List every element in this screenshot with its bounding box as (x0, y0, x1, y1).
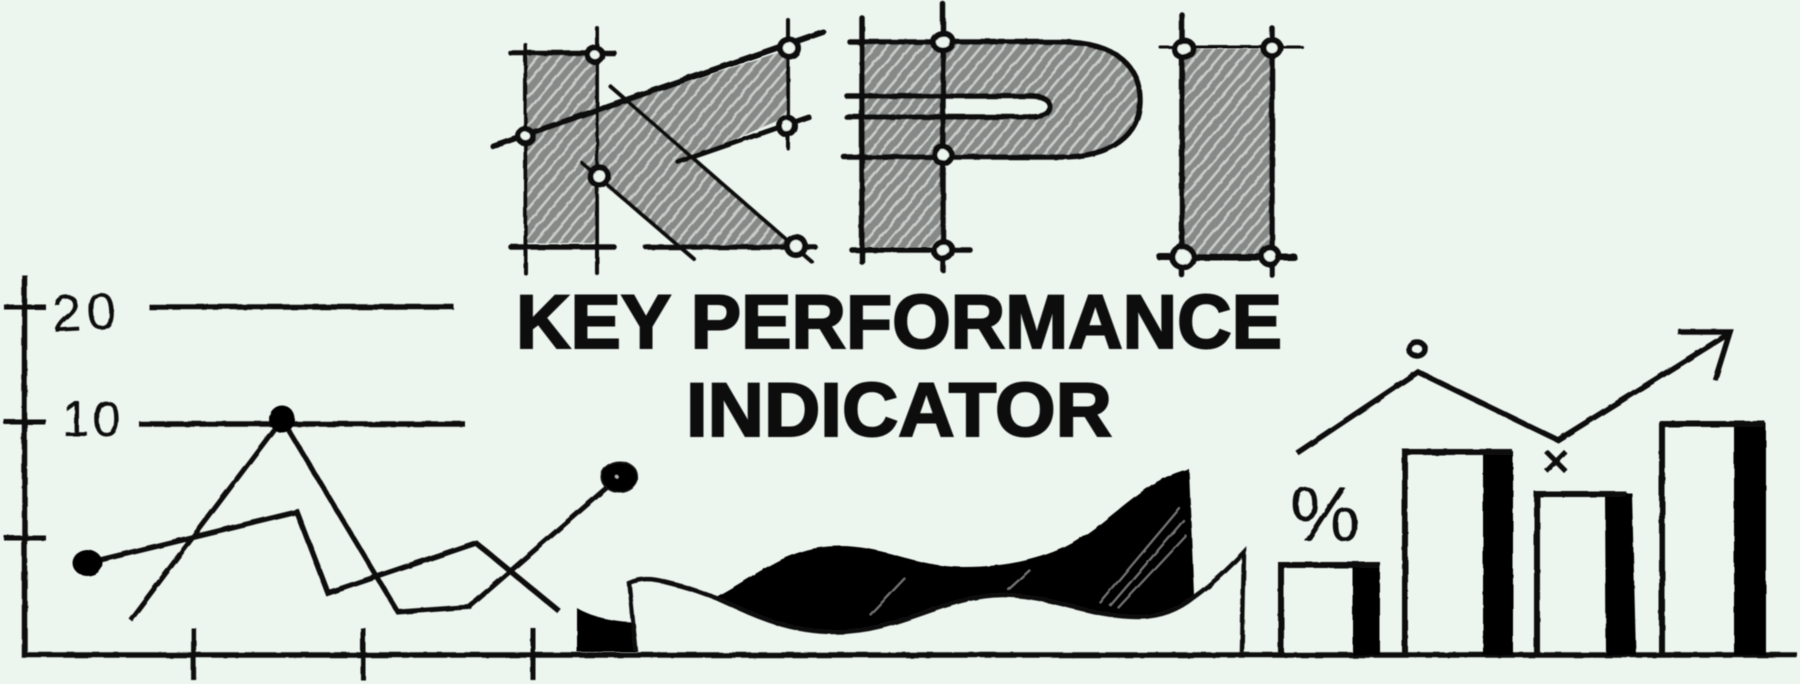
wave outline (629, 552, 1244, 653)
chart axes (4, 275, 1797, 680)
title: Key Performance Indicator (516, 280, 1282, 453)
trend arrow (1297, 332, 1730, 453)
icon: percent sign: % (1290, 470, 1360, 558)
axis label 20: 20 (51, 282, 123, 344)
data line A with dots (130, 406, 638, 620)
hatch highlights in area (870, 508, 1186, 615)
letter K (493, 20, 823, 273)
icon: circle above trend (1409, 342, 1425, 356)
bar 4 (1662, 423, 1766, 655)
title: Key Performance Indicator: KEY PERFORMANCE (516, 280, 1282, 365)
icon: multiply sign: × (1543, 435, 1569, 487)
bar 1 (1281, 565, 1380, 655)
small black area (577, 608, 638, 652)
bar chart (1281, 332, 1766, 655)
letter P (844, 4, 1140, 270)
axis label 10: 10 (62, 391, 124, 447)
bar 2 (1405, 451, 1513, 655)
line chart panel (4, 275, 1797, 680)
KPI sketched letters (493, 4, 1302, 275)
area chart (577, 469, 1244, 653)
bar 3 (1537, 493, 1636, 655)
letter I (1160, 15, 1302, 275)
large black wave area (716, 469, 1194, 632)
title: Key Performance Indicator: INDICATOR (686, 368, 1112, 453)
gridlines (139, 307, 465, 424)
data line B with dot (72, 512, 559, 611)
